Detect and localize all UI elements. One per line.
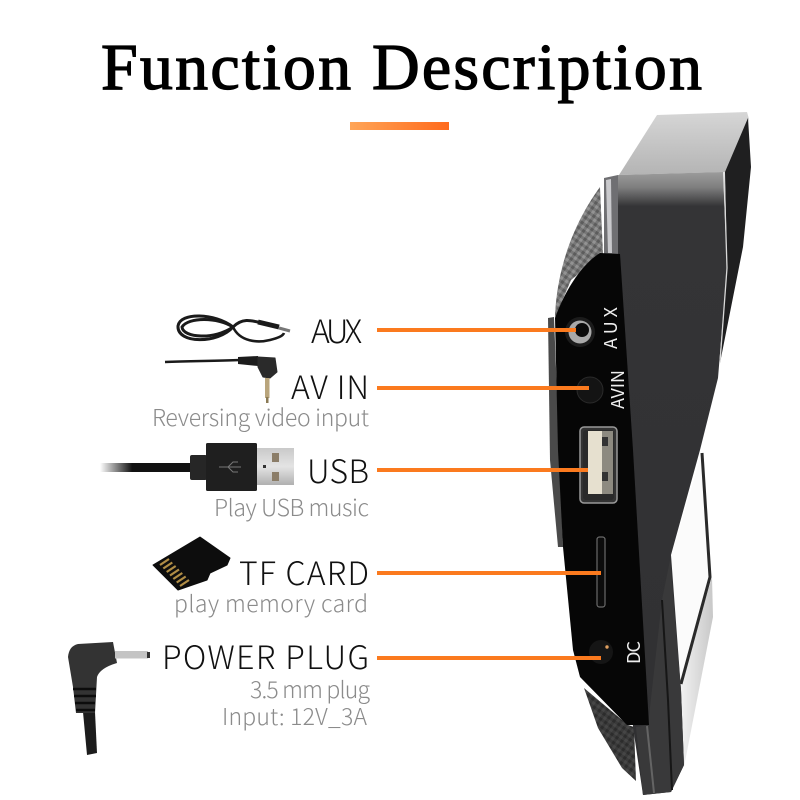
connector line: power plug [377, 656, 601, 660]
sublabel: input rating: Input: 12V_3A [222, 698, 367, 732]
icon: USB cable [100, 443, 294, 491]
port: USB socket [580, 427, 617, 503]
icon: TF memory card [153, 537, 230, 590]
label: TF CARD: TF CARD [239, 549, 369, 595]
shell highlight [720, 172, 727, 362]
title underline accent [350, 122, 449, 130]
port: TF card slot [597, 537, 605, 607]
screen panel [670, 453, 713, 767]
USB row [100, 443, 588, 523]
side rim strip [604, 175, 621, 254]
label: USB: USB [307, 447, 369, 493]
AUX row [178, 307, 576, 353]
textured lower grip [584, 688, 636, 781]
TF card row [153, 537, 601, 619]
icon: AUX cable [178, 316, 290, 341]
main housing [618, 172, 727, 795]
textured upper grip [555, 187, 603, 318]
label: AV IN: AV IN [291, 363, 369, 409]
port: AUX jack [565, 317, 595, 347]
connector line: TF card [377, 571, 601, 575]
connector line: AUX [377, 328, 576, 332]
AV IN row [152, 356, 589, 433]
connector line: AV IN [377, 386, 589, 390]
port label: AUX: AUX [597, 306, 623, 349]
connector line: USB [377, 468, 588, 472]
icon: AV IN right-angle cable [165, 356, 277, 403]
label: AUX: AUX [311, 307, 362, 353]
icon: power plug [68, 642, 150, 755]
port label: DC: DC [620, 641, 646, 664]
port: DC socket [589, 640, 613, 664]
port: AV IN jack [577, 377, 603, 403]
title: Function Description [101, 31, 702, 104]
black port panel [555, 253, 649, 725]
sun shade top [619, 112, 749, 175]
label: POWER PLUG: POWER PLUG [162, 633, 369, 679]
device side view [548, 112, 751, 795]
sublabel: reversing video input: Reversing video input [152, 399, 369, 433]
sublabel: play memory card: play memory card [174, 585, 368, 619]
power plug row [68, 633, 601, 755]
sublabel: play USB music: Play USB music [214, 489, 369, 523]
sublabel: 3.5 mm plug: 3.5 mm plug [250, 671, 370, 705]
port label: AVIN: AVIN [604, 370, 630, 409]
sun shade right flap [720, 118, 751, 363]
left rear tab [548, 317, 563, 547]
